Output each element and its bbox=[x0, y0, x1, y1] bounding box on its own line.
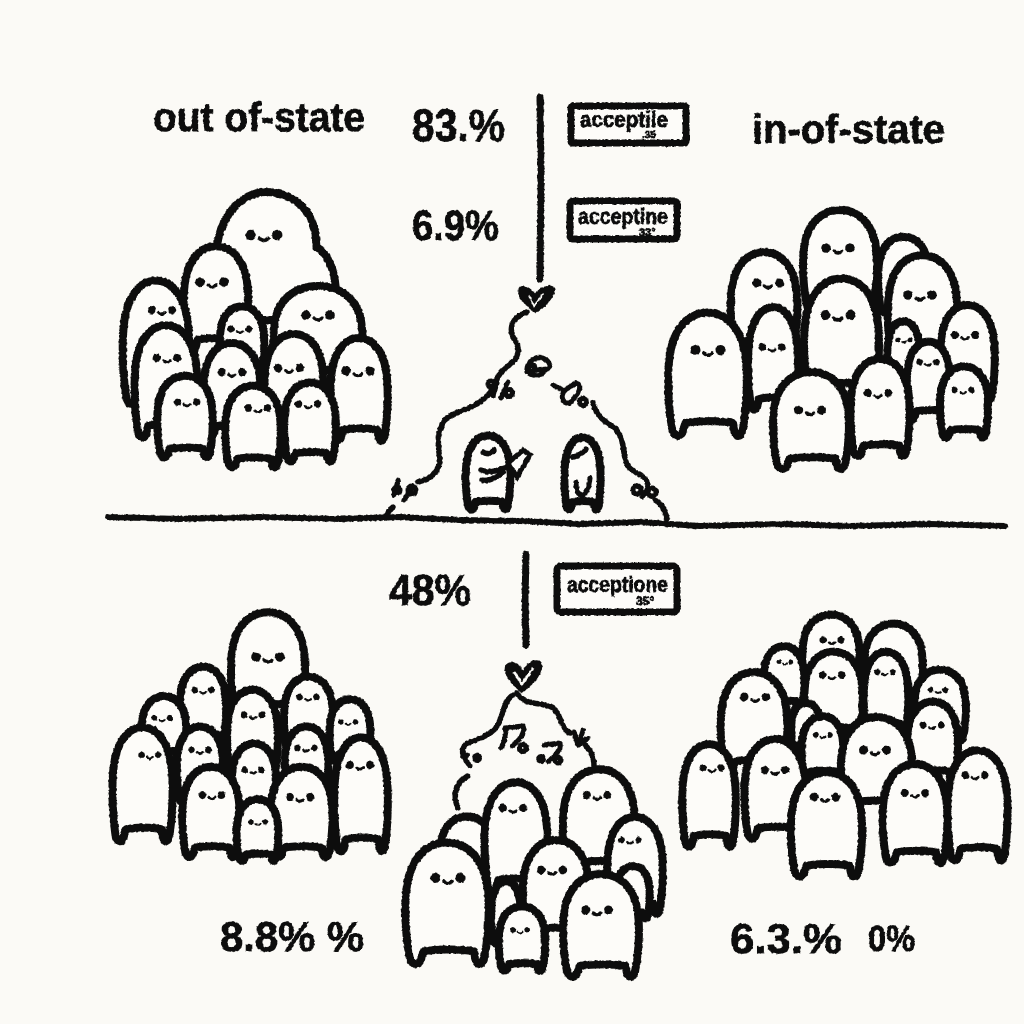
character bbox=[791, 703, 821, 750]
character bbox=[112, 727, 173, 841]
label: acceptione: acceptione bbox=[567, 572, 668, 597]
character bbox=[157, 376, 213, 457]
character bbox=[907, 342, 950, 419]
character bbox=[330, 338, 388, 441]
stat: 6.3.%: 6.3.% bbox=[730, 915, 842, 962]
character bbox=[791, 772, 862, 877]
character bbox=[135, 325, 197, 437]
character bbox=[802, 615, 860, 691]
character bbox=[334, 737, 388, 851]
icon: heart bbox=[506, 661, 541, 692]
character bbox=[888, 255, 957, 360]
character bbox=[264, 334, 324, 431]
character bbox=[864, 652, 908, 732]
character bbox=[182, 767, 240, 857]
character bbox=[940, 305, 995, 400]
crowd: bottom right bbox=[682, 615, 1008, 877]
label: acceptione bbox=[557, 566, 677, 612]
character bbox=[878, 237, 929, 313]
character bbox=[850, 359, 910, 456]
character bbox=[284, 383, 336, 461]
character bbox=[440, 816, 494, 888]
heading: in-of-state: in-of-state bbox=[752, 106, 945, 152]
character bbox=[285, 726, 328, 798]
character bbox=[231, 612, 305, 717]
character bbox=[184, 246, 248, 351]
doodle: vine marks bbox=[394, 358, 656, 500]
character bbox=[764, 646, 804, 708]
character bbox=[668, 313, 747, 436]
character bbox=[804, 652, 863, 737]
icon: book bbox=[508, 450, 530, 477]
stat: 83.%: 83.% bbox=[412, 100, 505, 151]
character bbox=[721, 672, 787, 772]
crowd: bottom left bbox=[112, 612, 388, 861]
character bbox=[744, 739, 806, 839]
character bbox=[177, 727, 223, 803]
top centre heart vine bbox=[385, 286, 667, 519]
character bbox=[883, 764, 947, 863]
doodle: vine marks bbox=[465, 726, 588, 766]
character bbox=[947, 750, 1008, 860]
character bbox=[563, 874, 639, 977]
heading: out of-state: out of-state bbox=[153, 94, 365, 140]
character bbox=[405, 843, 489, 964]
character bbox=[180, 667, 226, 743]
label: acceptine: 33° bbox=[639, 227, 656, 239]
character bbox=[227, 690, 278, 775]
stat: 6.9%: 6.9% bbox=[412, 202, 499, 250]
crowd: top left bbox=[123, 192, 388, 467]
character bbox=[523, 840, 589, 940]
bottom vertical divider bbox=[525, 554, 526, 645]
character bbox=[203, 343, 261, 436]
character bbox=[864, 624, 923, 700]
character bbox=[616, 866, 650, 918]
character bbox=[802, 716, 843, 778]
character bbox=[123, 281, 189, 404]
character bbox=[804, 278, 879, 397]
character bbox=[907, 702, 958, 779]
character bbox=[748, 307, 798, 410]
label: acceptione: 35° bbox=[636, 594, 654, 608]
character bbox=[274, 286, 362, 381]
character bbox=[284, 677, 333, 753]
character bbox=[271, 767, 332, 857]
icon: heart bbox=[519, 286, 554, 312]
character bbox=[940, 366, 988, 438]
character bbox=[563, 769, 635, 874]
character bbox=[887, 321, 920, 383]
ground line bbox=[108, 517, 1005, 526]
character bbox=[607, 817, 663, 914]
stat: 48%: 48% bbox=[389, 566, 471, 615]
crowd: bottom centre bbox=[405, 769, 663, 977]
character bbox=[731, 252, 797, 352]
stat: 0%: 0% bbox=[868, 918, 915, 959]
crowd: top right bbox=[668, 210, 995, 469]
character bbox=[220, 306, 264, 373]
character bbox=[225, 386, 281, 467]
label: acceptine: acceptine bbox=[578, 204, 668, 229]
stat: 8.8% %: 8.8% % bbox=[220, 913, 364, 960]
character bbox=[803, 210, 877, 310]
character bbox=[491, 881, 521, 943]
character bbox=[237, 799, 278, 861]
label: acceptile: .35 bbox=[642, 130, 656, 141]
character bbox=[232, 744, 276, 815]
label: acceptile: acceptile bbox=[580, 107, 668, 132]
character bbox=[499, 906, 545, 971]
character bbox=[773, 372, 849, 469]
character bbox=[682, 744, 736, 847]
small character standing bbox=[564, 438, 601, 510]
character bbox=[914, 670, 966, 741]
character bbox=[841, 717, 912, 812]
character bbox=[485, 782, 547, 891]
label: acceptile bbox=[571, 106, 686, 143]
bottom left heart vine bbox=[455, 661, 594, 808]
character bbox=[142, 696, 186, 758]
character bbox=[330, 699, 370, 761]
small character reading a book bbox=[466, 436, 530, 510]
character: tall back bbox=[216, 192, 336, 320]
top vertical divider bbox=[540, 97, 541, 279]
label: acceptine bbox=[570, 201, 677, 239]
